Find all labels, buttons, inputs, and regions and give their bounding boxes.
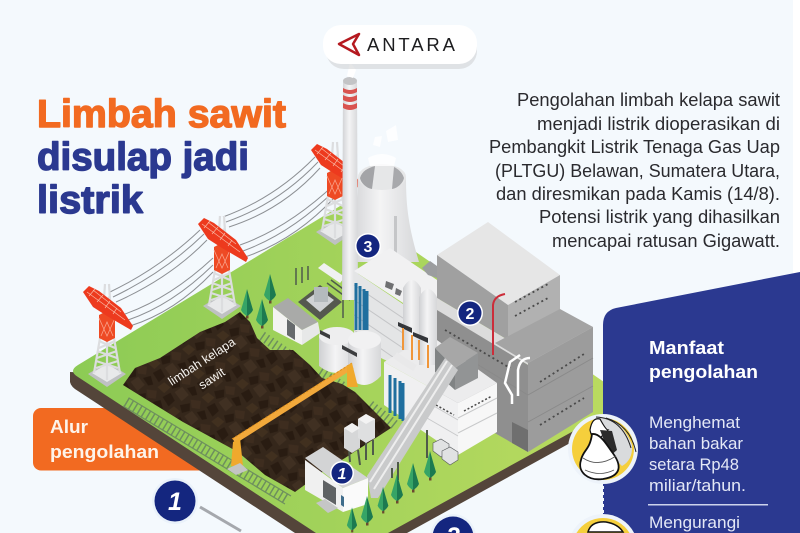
marker 1 on plant <box>330 461 354 485</box>
trees: back group <box>241 274 276 328</box>
intro text block: Pembangkit Listrik Tenaga Gas Uap <box>489 136 780 157</box>
intro text block: dan diresmikan pada Kamis (14/8). <box>496 183 780 204</box>
panel: manfaat pengolahan <box>603 272 800 533</box>
benefit 1 text <box>649 414 746 495</box>
storage tanks <box>319 327 381 385</box>
silos: front pair <box>344 414 375 465</box>
panel heading: pengolahan <box>649 361 758 382</box>
building: silos block and white annex <box>384 280 497 455</box>
twin silos <box>395 280 437 368</box>
logo: ANTARA <box>323 25 477 69</box>
pile label: sawit <box>196 365 228 392</box>
benefit 1 text: miliar/tahun. <box>649 477 746 495</box>
gantry crane <box>227 363 358 475</box>
pylon: back <box>311 142 361 245</box>
conveyor <box>367 358 458 498</box>
label: alur pengolahan <box>33 408 223 470</box>
railway <box>123 336 395 504</box>
icon: second benefit <box>572 514 634 533</box>
building: unit 1 receiving house <box>305 447 368 513</box>
step 1 marker and connector <box>152 478 241 531</box>
pylon: front <box>83 284 133 387</box>
marker 1 on plant: 1 <box>338 466 347 483</box>
power lines <box>110 157 335 326</box>
benefit 1 text: setara Rp48 <box>649 456 739 474</box>
intro text block: Potensi listrik yang dihasilkan <box>539 206 780 227</box>
marker 2 on plant <box>457 300 483 326</box>
building: main boiler block <box>354 248 440 385</box>
chimney <box>342 62 358 300</box>
heading: title: disulap jadi <box>37 136 249 179</box>
panel heading <box>649 337 758 382</box>
building: unit 2 turbine hall <box>437 222 593 452</box>
benefit 2 text: Mengurangi <box>649 514 740 532</box>
marker 3 on plant <box>355 233 381 259</box>
icon: fuel saving <box>568 414 638 484</box>
substation building <box>273 263 350 345</box>
logo: ANTARA: ANTARA <box>367 34 456 55</box>
marker 3 on plant: 3 <box>364 239 373 256</box>
heading: title: listrik <box>37 179 143 222</box>
benefit 1 text: bahan bakar <box>649 435 744 453</box>
benefit 1 text: Menghemat <box>649 414 740 432</box>
label: alur pengolahan: pengolahan <box>50 442 159 462</box>
AC units <box>433 439 458 465</box>
step 1 marker and connector: 1 <box>168 488 182 516</box>
platform <box>70 203 630 533</box>
waste pile <box>123 312 391 492</box>
pylon: middle <box>198 216 248 319</box>
intro text block: Pengolahan limbah kelapa sawit <box>517 89 780 110</box>
cooling tower <box>348 125 419 266</box>
heading: title: Limbah sawit <box>37 93 286 136</box>
trees: front row <box>347 451 436 532</box>
intro text block <box>489 89 780 251</box>
label: alur pengolahan: Alur <box>50 417 88 437</box>
panel heading: Manfaat <box>649 337 724 358</box>
heading: title <box>37 93 286 222</box>
intro text block: mencapai ratusan Gigawatt. <box>552 230 780 251</box>
marker 2 on plant: 2 <box>466 306 475 323</box>
pile label: limbah kelapa <box>166 335 238 389</box>
intro text block: menjadi listrik dioperasikan di <box>537 113 780 134</box>
step 2 marker <box>430 514 476 533</box>
intro text block: (PLTGU) Belawan, Sumatera Utara, <box>495 160 780 181</box>
